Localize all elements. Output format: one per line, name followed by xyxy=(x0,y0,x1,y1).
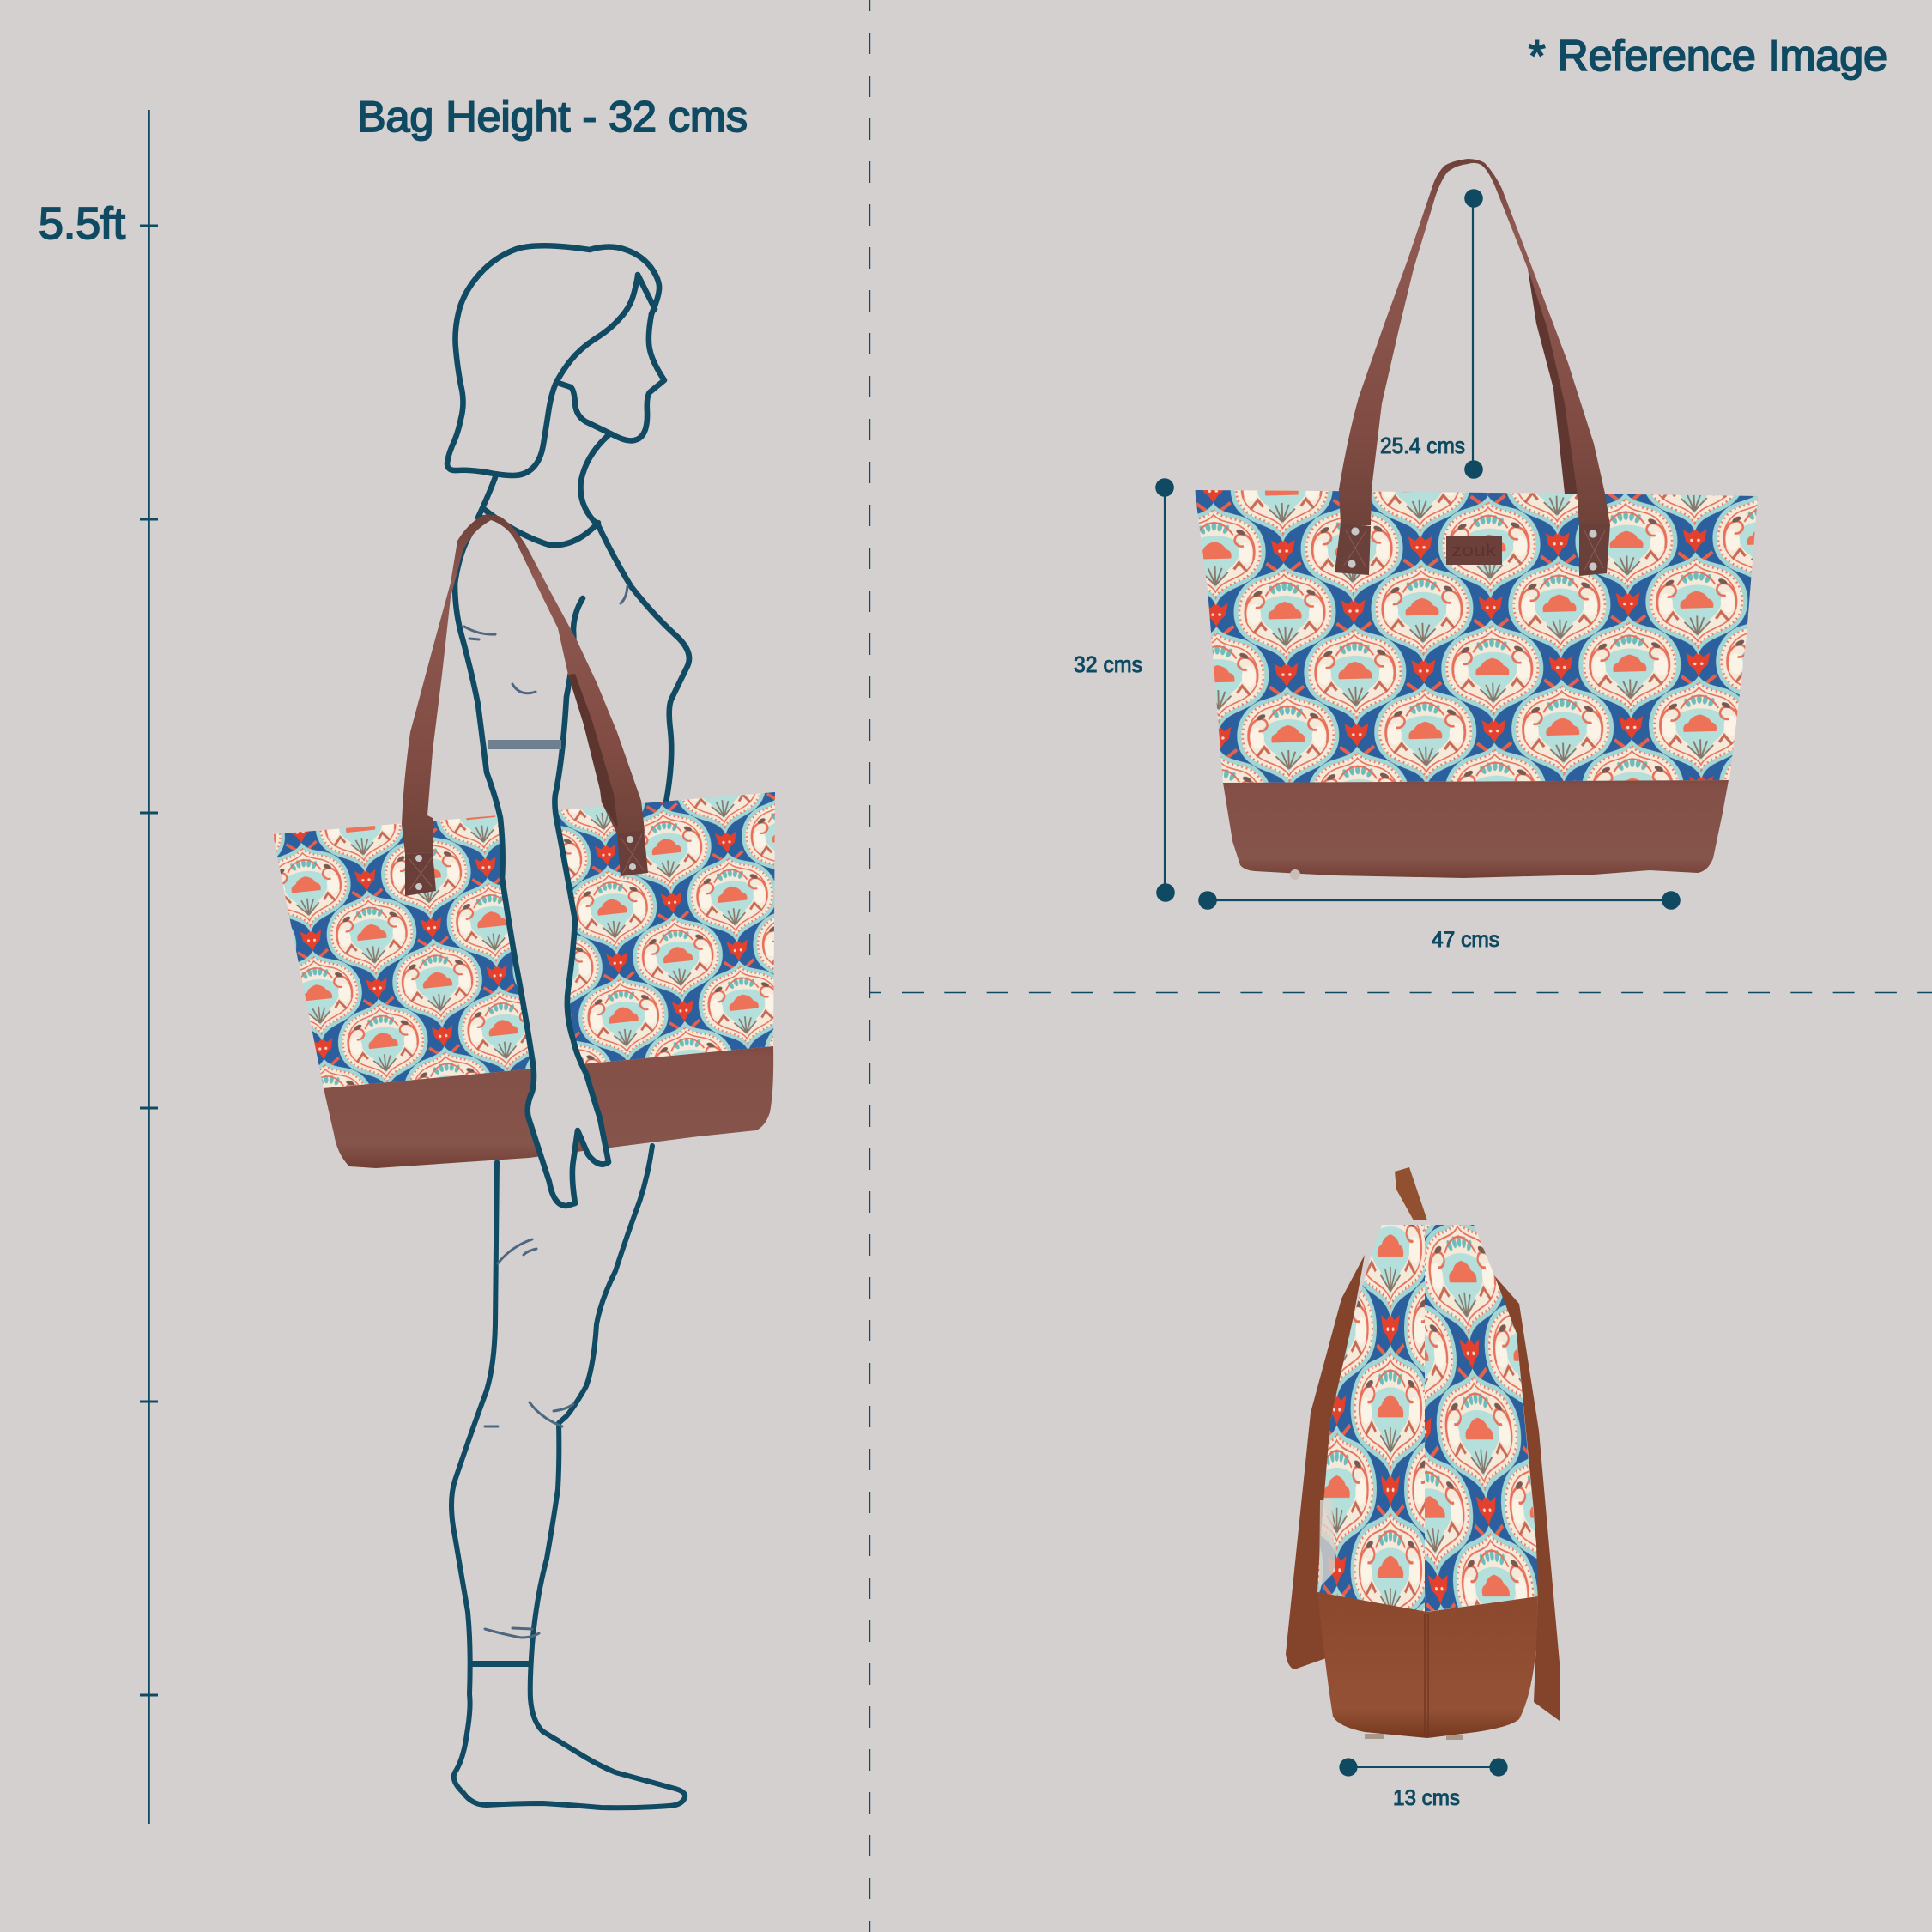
label: 47 cms: 47 cms xyxy=(1432,928,1499,952)
bag worn: fabric body xyxy=(273,792,775,1088)
side bag: top tab xyxy=(1395,1167,1427,1220)
figure: arm xyxy=(455,518,609,1206)
bag worn: leather base xyxy=(324,1046,773,1168)
figure: woman outline with worn bag xyxy=(273,245,775,1808)
front bag: right tab xyxy=(1579,524,1610,576)
figure: face and neck xyxy=(478,314,664,545)
bag worn: right tab xyxy=(617,830,648,876)
front bag: brand patch: zouk xyxy=(1451,542,1497,560)
bag worn: left strap xyxy=(402,515,491,854)
dimension: handle drop 25.4 cms xyxy=(1380,189,1483,479)
side bag: faded fabric edge xyxy=(1319,1500,1335,1588)
front bag: right strap xyxy=(1468,159,1610,525)
front bag: brand patch xyxy=(1446,536,1502,565)
front bag: right strap shadow xyxy=(1528,269,1579,494)
side view bag xyxy=(1286,1167,1560,1740)
dimension: width 47 cms xyxy=(1198,891,1681,952)
figure: legs and foot xyxy=(451,1146,685,1808)
side bag: metal feet xyxy=(1365,1734,1463,1740)
label: 25.4 cms: 25.4 cms xyxy=(1380,433,1465,458)
heading: bag height: Bag Height - 32 cms xyxy=(357,93,748,141)
side bag: leather base xyxy=(1317,1592,1538,1738)
dimension: height 32 cms xyxy=(1074,478,1175,902)
ruler label: 5.5ft: 5.5ft xyxy=(39,199,126,249)
front view bag xyxy=(1195,159,1758,880)
front bag: metal foot xyxy=(1290,869,1300,880)
figure: waist band xyxy=(488,740,561,749)
front bag: leather base xyxy=(1223,780,1729,878)
side bag: right strap xyxy=(1493,1275,1560,1721)
side bag: centre seam xyxy=(1425,1614,1428,1735)
side bag: right fabric panel xyxy=(1425,1225,1538,1612)
bag worn: left tab xyxy=(405,852,436,896)
dimension: depth 13 cms xyxy=(1339,1758,1508,1810)
note: reference image: * Reference Image xyxy=(1529,32,1887,80)
front bag: left strap xyxy=(1339,159,1468,525)
bag worn: right strap xyxy=(483,514,645,834)
label: 13 cms: 13 cms xyxy=(1393,1786,1460,1810)
front bag: left tab xyxy=(1335,524,1371,575)
label: 32 cms: 32 cms xyxy=(1074,651,1142,677)
side bag: left strap xyxy=(1286,1255,1365,1669)
figure: chest xyxy=(598,525,689,802)
figure: shading marks xyxy=(464,586,627,1638)
figure: hair xyxy=(447,245,659,475)
bag worn: strap shadow xyxy=(568,674,618,828)
height ruler xyxy=(140,110,158,1824)
figure: ankle band xyxy=(469,1661,530,1667)
side bag: left fabric panel xyxy=(1317,1225,1425,1612)
front bag: fabric body xyxy=(1195,490,1758,783)
